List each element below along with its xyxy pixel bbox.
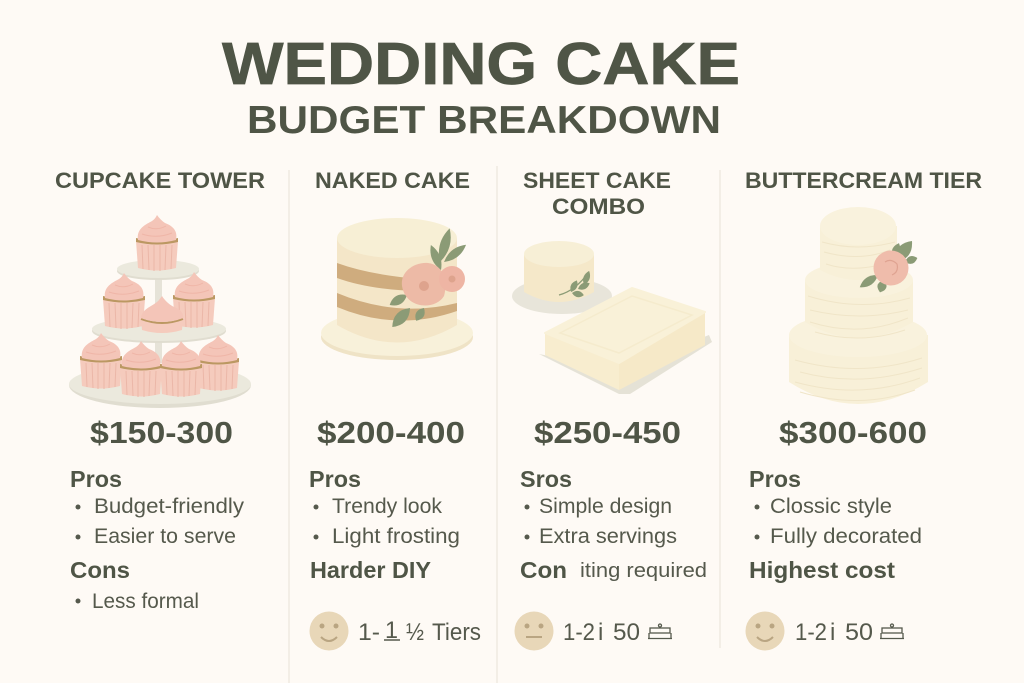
servings note: sheet cake combo: 50 (613, 619, 640, 646)
cons list: cupcake tower: Cons (70, 557, 130, 583)
cons: sheet cake combo: iting required (580, 559, 707, 582)
panel: sheet cake combo (512, 168, 712, 650)
illustration: naked cake (321, 218, 473, 360)
servings note: buttercream tier: 50 (845, 619, 873, 646)
heading: sheet cake combo: SHEET CAKE (523, 168, 671, 193)
servings note: sheet cake combo (563, 619, 640, 646)
icon: smiling face (746, 612, 784, 650)
pros list: naked cake (309, 466, 460, 548)
illustration: buttercream tier cake (789, 207, 928, 404)
pros list: naked cake: Light frosting (332, 524, 460, 548)
panel: naked cake (309, 168, 481, 650)
pros list: buttercream tier (749, 466, 922, 548)
illustration: sheet cake combo (512, 241, 712, 394)
price: sheet cake combo: $250-450 (534, 415, 681, 450)
heading: sheet cake combo (523, 168, 671, 219)
pros list: buttercream tier: Fully decorated (770, 524, 922, 548)
pros list: cupcake tower: Pros (70, 466, 122, 492)
pros list: cupcake tower: Easier to serve (94, 524, 236, 548)
panel: buttercream tier (745, 168, 982, 650)
cons: sheet cake combo (520, 557, 707, 583)
price: naked cake: $200-400 (317, 415, 465, 450)
tiers note: naked cake (358, 617, 481, 646)
pros list: sheet cake combo (520, 466, 677, 548)
cons: sheet cake combo: Con (520, 557, 567, 583)
icon: neutral face (514, 612, 554, 650)
pros list: sheet cake combo: Extra servings (539, 524, 677, 548)
heading: cupcake tower: CUPCAKE TOWER (55, 168, 265, 193)
servings note: sheet cake combo: 1-2 (563, 619, 595, 646)
pros list: buttercream tier: Clossic style (770, 494, 892, 518)
icon: small cake (648, 624, 672, 638)
pros list: cupcake tower: Budget-friendly (94, 494, 244, 518)
price: cupcake tower: $150-300 (90, 415, 233, 450)
cons: naked cake: Harder DIY (310, 557, 431, 583)
icon: small cake (880, 624, 904, 638)
servings note: sheet cake combo: i (598, 619, 603, 646)
cons list: cupcake tower: Less formal (92, 589, 199, 613)
pros list: cupcake tower (70, 466, 244, 548)
pros list: buttercream tier: Pros (749, 466, 801, 492)
price: buttercream tier: $300-600 (779, 415, 927, 450)
title (222, 31, 740, 142)
cons: buttercream tier: Highest cost (749, 557, 895, 583)
tiers note: naked cake: ½ (406, 619, 424, 646)
illustration: cupcake tower (69, 215, 251, 408)
tiers note: naked cake: 1 (385, 617, 398, 644)
pros list: sheet cake combo: Simple design (539, 494, 672, 518)
title: BUDGET BREAKDOWN (247, 99, 721, 142)
tiers note: naked cake: 1- (358, 619, 380, 646)
heading: sheet cake combo: COMBO (552, 194, 645, 219)
pros list: sheet cake combo: Sros (520, 466, 572, 492)
cons list: cupcake tower (70, 557, 199, 613)
pros list: naked cake: Trendy look (332, 494, 442, 518)
servings note: buttercream tier: i (830, 619, 835, 646)
heading: buttercream tier: BUTTERCREAM TIER (745, 168, 982, 193)
title: WEDDING CAKE (222, 31, 740, 97)
tiers note: naked cake: Tiers (432, 619, 481, 646)
heading: naked cake: NAKED CAKE (315, 168, 470, 193)
icon: smiling face (310, 612, 348, 650)
servings note: buttercream tier (795, 619, 873, 646)
pros list: naked cake: Pros (309, 466, 361, 492)
panel: cupcake tower (55, 168, 265, 613)
servings note: buttercream tier: 1-2 (795, 619, 827, 646)
